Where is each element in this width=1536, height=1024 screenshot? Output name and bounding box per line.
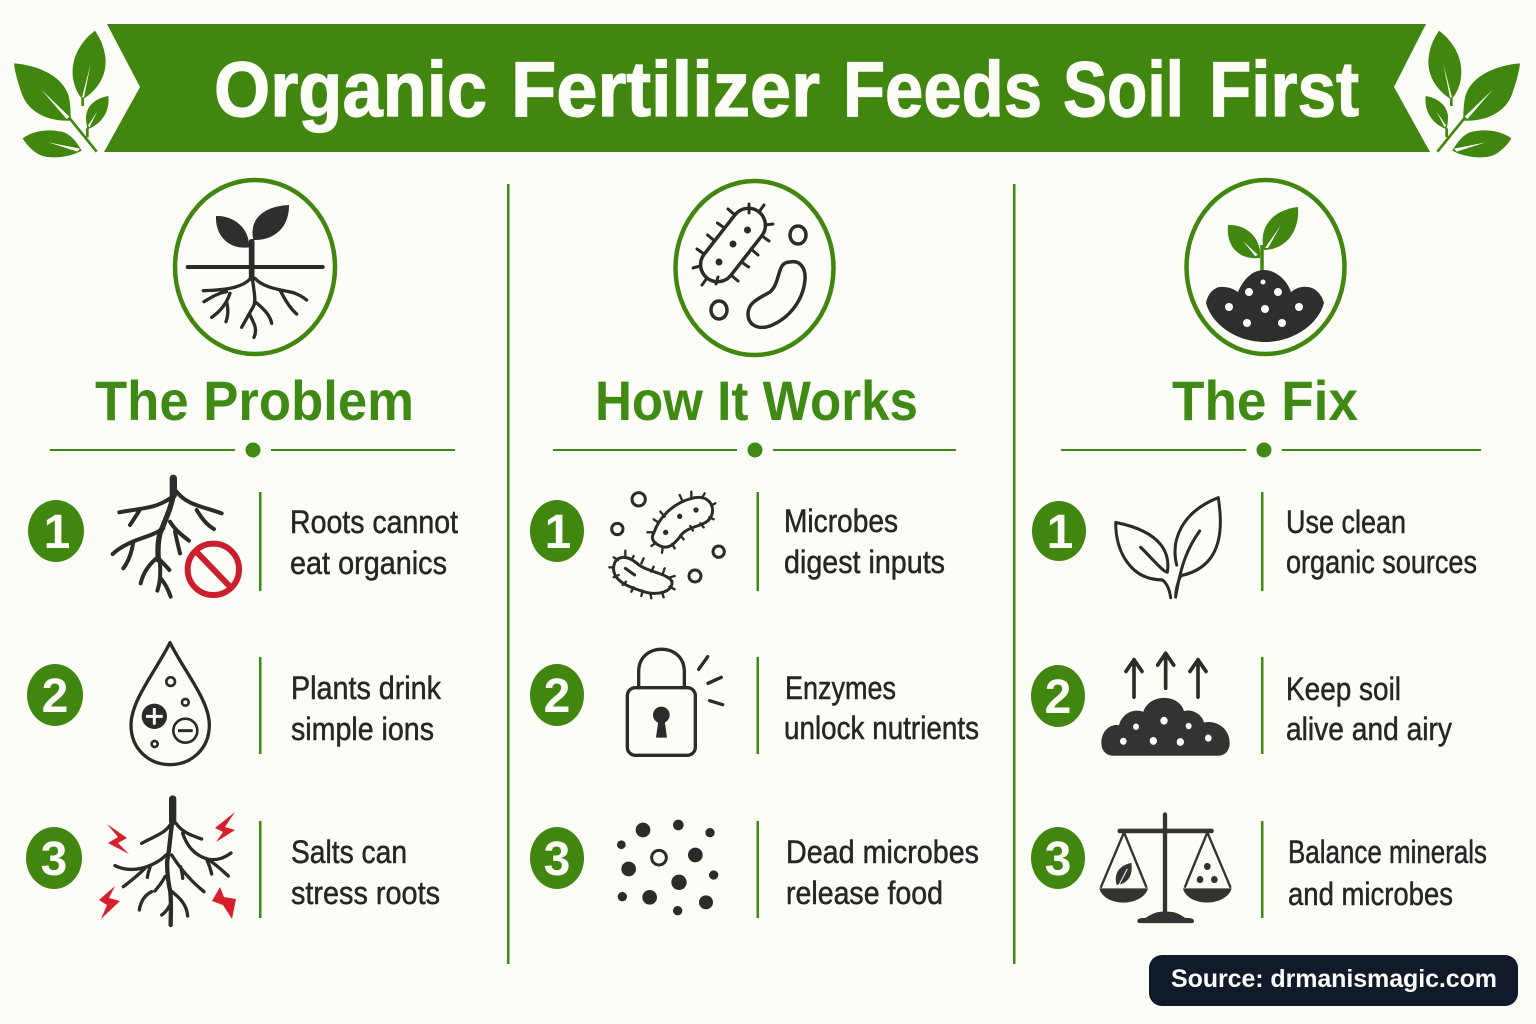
heading: How It Works: How It Works [595, 369, 918, 432]
number 2: 2 [1045, 671, 1071, 724]
number 1: 1 [545, 506, 571, 559]
number 1: 1 [1047, 506, 1073, 559]
title: Soil [1063, 45, 1184, 133]
source badge: Source: drmanismagic.com [1171, 965, 1497, 993]
number 2 [27, 664, 83, 726]
text [1286, 671, 1452, 747]
title banner [104, 24, 1430, 152]
heading: The Fix: The Fix [1172, 369, 1358, 432]
text: Keep soil [1286, 671, 1401, 707]
number 1 [28, 500, 84, 562]
number 2 [530, 664, 584, 726]
item 2: enzymes unlock nutrients [530, 649, 979, 755]
icon: padlock [627, 649, 723, 755]
panel: How It Works [530, 181, 979, 918]
text [786, 834, 979, 911]
title: Feeds [843, 45, 1042, 133]
text: and microbes [1288, 876, 1453, 912]
panel: The Fix [1031, 180, 1487, 923]
text: Microbes [784, 503, 898, 539]
heading: The Problem: The Problem [95, 369, 414, 432]
icon: scattered particles [617, 820, 718, 915]
text: alive and airy [1286, 711, 1452, 747]
number 1: 1 [44, 506, 70, 559]
number 3: 3 [41, 833, 67, 886]
number 3 [530, 827, 584, 889]
icon: left leaf sprig [14, 31, 109, 157]
text [784, 503, 945, 580]
number 1 [530, 500, 584, 562]
icon: soil mound with arrows [1101, 653, 1230, 756]
text [1286, 504, 1477, 580]
item 2: plants drink simple ions [27, 643, 442, 765]
text: organic sources [1286, 544, 1477, 580]
icon: outlined leaves [1116, 498, 1220, 598]
text [1288, 834, 1487, 912]
icon: seedling with roots [175, 180, 335, 354]
title: Fertilizer [511, 45, 820, 133]
icon: microbes in circle [676, 181, 834, 355]
text: simple ions [291, 711, 434, 747]
text [291, 834, 440, 911]
icon: seedling in soil [1186, 180, 1344, 354]
heading divider [553, 442, 956, 458]
item 1: microbes digest inputs [530, 492, 945, 598]
item 2: keep soil alive and airy [1031, 653, 1452, 756]
icon: right leaf sprig [1425, 31, 1520, 157]
text: Salts can [291, 834, 407, 870]
item 3: salts can stress roots [26, 799, 440, 925]
text: Dead microbes [786, 834, 979, 870]
text: release food [786, 875, 943, 911]
text: Plants drink [291, 670, 442, 706]
heading divider [50, 442, 455, 458]
text: Roots cannot [290, 504, 458, 540]
text: Use clean [1286, 504, 1406, 540]
title [214, 45, 1359, 133]
title: First [1209, 45, 1359, 133]
item 1: roots cannot eat organics [28, 478, 458, 597]
text: digest inputs [784, 544, 945, 580]
number 3: 3 [1045, 833, 1071, 886]
text: Enzymes [785, 670, 896, 706]
item 3: dead microbes release food [530, 820, 979, 918]
text: stress roots [291, 875, 440, 911]
number 2: 2 [42, 670, 68, 723]
icon: two microbes [609, 492, 724, 598]
number 2: 2 [544, 670, 570, 723]
text: Balance minerals [1288, 834, 1487, 870]
text: eat organics [290, 545, 447, 581]
text [290, 504, 458, 581]
icon: roots with prohibition sign [113, 478, 239, 597]
number 2 [1031, 665, 1085, 727]
heading divider [1061, 442, 1481, 458]
number 3: 3 [544, 833, 570, 886]
source badge [1149, 955, 1518, 1006]
title: Organic [214, 45, 487, 133]
icon: stressed roots with red bolts [99, 799, 236, 925]
text [784, 670, 979, 746]
panel: The Problem [26, 180, 458, 925]
icon: water drop with ions [131, 643, 209, 765]
item 3: balance minerals and microbes [1031, 815, 1487, 923]
number 3 [26, 827, 82, 889]
item 1: use clean organic sources [1032, 492, 1477, 598]
icon: balance scale [1099, 815, 1232, 923]
text [291, 670, 442, 747]
text: unlock nutrients [784, 710, 979, 746]
number 1 [1032, 501, 1086, 561]
number 3 [1031, 827, 1085, 889]
